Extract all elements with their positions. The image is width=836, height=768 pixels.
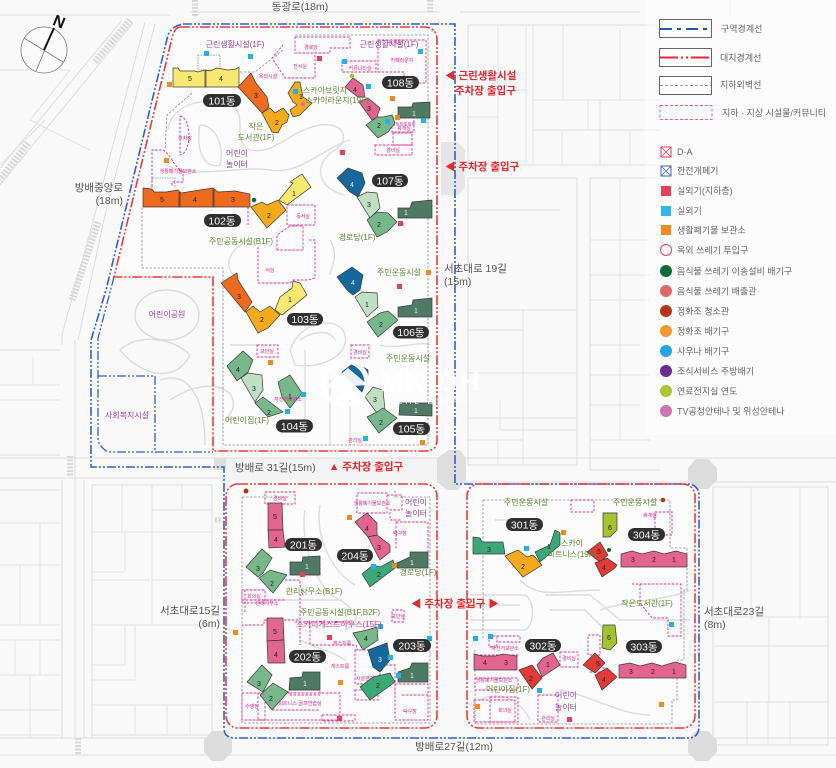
legend: sauna vent: 사우나 배기구: [677, 346, 729, 356]
road: 23gil: 서초대로23길: [704, 605, 764, 618]
facility labels: purple: 어린이공원: [149, 309, 185, 319]
facility labels: purple: 어린이: [226, 148, 248, 158]
legend: underground wall: 지하외벽선: [720, 79, 761, 90]
tiny facility captions: 커뮤니티실: [348, 65, 372, 72]
303 pill: 303동: [630, 642, 658, 654]
203 pill: [393, 639, 431, 652]
zone boundary line: [91, 24, 699, 738]
building 103: 3: [237, 294, 241, 301]
facility labels: green: 주민운동시설: [386, 353, 430, 363]
watermark logo: MK.DH: [380, 366, 480, 397]
building 203: 2: [376, 683, 380, 690]
building 204: 1: [410, 560, 414, 567]
building 302: 2: [529, 676, 533, 683]
facility labels: purple: 근린생활시설(1F): [360, 39, 419, 49]
facility labels: green: 경로당(1F): [400, 567, 437, 577]
building 202: 2: [269, 696, 273, 703]
building 203: 4: [364, 636, 368, 643]
facility labels: green: 경로당(1F): [339, 232, 376, 242]
building 304: 2: [652, 557, 656, 564]
entrance: north-east: 주차장 출입구: [455, 84, 516, 97]
building 101: [173, 67, 312, 133]
building 107: 2: [377, 222, 381, 229]
106 pill: 106동: [397, 327, 425, 339]
building 204: 4: [365, 526, 369, 533]
tiny facility captions: 회의실: [498, 707, 512, 714]
building 201: 1: [305, 564, 309, 571]
building 302: 1: [546, 662, 550, 669]
entrance: north-east: ◀ 근린생활시설: [445, 69, 516, 82]
legend: kitchen vent: 조식서비스 주방배기: [677, 366, 754, 376]
road: west: 방배중앙로: [75, 182, 123, 194]
legend: site boundary: 대지경계선: [720, 52, 761, 63]
road: east: (15m): [444, 276, 471, 288]
tiny facility captions: 휴게실: [643, 512, 657, 519]
road: north: 동광로(18m): [272, 1, 328, 13]
building 104: 4: [236, 367, 240, 374]
101 pill: 101동: [208, 96, 236, 108]
parking entrance labels: [329, 69, 520, 610]
facility labels: green: 스카이브릿지: [303, 85, 347, 95]
tiny facility captions: 독서실: [296, 213, 310, 220]
building 108: 1: [412, 111, 416, 118]
building 104: [227, 351, 302, 417]
compass: [21, 12, 67, 73]
tiny facility captions: 회의실: [247, 593, 261, 600]
watermark logo: [323, 361, 480, 406]
302 pill: [525, 639, 561, 652]
road: 15gil: (6m): [198, 618, 220, 630]
building 202: 4: [274, 652, 278, 659]
building 102: 2: [267, 213, 271, 220]
building 202: 3: [257, 681, 261, 688]
road: 23gil: (8m): [704, 619, 726, 631]
building 302: 3: [504, 660, 508, 667]
tiny facility captions: 자전거보관소: [491, 645, 519, 652]
building 203: [353, 627, 428, 700]
building 303: 1: [672, 669, 676, 676]
legend: sauna vent: [660, 345, 729, 357]
building 105: 1: [414, 408, 418, 415]
building 108: 2: [377, 123, 381, 130]
building 204: [355, 513, 428, 587]
tiny facility captions: 탁구장: [393, 530, 407, 537]
legend: zone boundary: 구역경계선: [721, 23, 762, 34]
tiny facility captions: 생활폐기물보관소: [354, 500, 391, 507]
building 103: 1: [288, 297, 292, 304]
facility labels: purple: [105, 39, 577, 712]
building 202: 5: [273, 629, 277, 636]
tiny facility captions: 피트니스·골프연습실: [278, 700, 322, 707]
building 304: 3: [631, 557, 635, 564]
building 303: 2: [651, 669, 655, 676]
building 102: [143, 174, 311, 228]
building 303: [583, 625, 686, 690]
entrance: north-east: [445, 69, 516, 97]
legend: food waste pipe: [660, 285, 757, 297]
site interiors: [100, 30, 693, 726]
building 105: 3: [373, 397, 377, 404]
facility labels: green: [209, 85, 673, 694]
301 pill: [506, 518, 543, 532]
social welfare and park inner boundary: [98, 277, 213, 452]
facility labels: green: 주민운동시설: [377, 267, 421, 277]
facility labels: green: 주민운동시설: [613, 497, 657, 507]
108 pill: [382, 76, 419, 90]
304 pill: 304동: [633, 530, 660, 542]
302 pill: 302동: [529, 640, 557, 652]
tiny facility captions: 수영장: [245, 703, 259, 710]
building 104: 1: [288, 394, 292, 401]
201 pill: [285, 538, 322, 552]
community facility dashed outlines: north block: [152, 37, 431, 358]
102 pill: 102동: [208, 216, 236, 228]
facility labels: purple: 놀이터: [226, 159, 248, 169]
105 pill: [393, 422, 430, 436]
legend: outdoor unit: [661, 205, 702, 216]
tiny facility captions: 식당: [265, 267, 275, 274]
building number pills: [203, 76, 665, 664]
304 pill: [628, 528, 665, 542]
legend: septic cleanout: 정화조 청소관: [677, 306, 729, 316]
road: west: [75, 182, 123, 207]
facility labels: green: 스카이라운지(19F): [305, 95, 369, 105]
building 104: 3: [252, 386, 256, 393]
tiny facility captions: 경비실: [562, 655, 576, 662]
building 106: 1: [414, 308, 418, 315]
facility labels: purple: 놀이터: [555, 702, 577, 712]
building 204: 2: [377, 572, 381, 579]
building 303: 6: [607, 635, 611, 642]
tiny facility captions: 시설관리: [356, 675, 374, 682]
building 202: [247, 618, 320, 710]
building 303: 3: [629, 669, 633, 676]
legend: food waste pipe: 음식물 쓰레기 배출관: [677, 286, 757, 296]
building 304: 5: [597, 549, 601, 556]
building 101: 5: [188, 76, 192, 83]
landscape paths: [120, 101, 690, 720]
facility labels: green: 피트니스(19F): [548, 549, 597, 559]
legend: antenna: TV공청안테나 및 위성안테나: [677, 406, 785, 416]
building 303: 5: [596, 661, 600, 668]
road: east: 서초대로 19길: [444, 262, 507, 275]
legend panel: [645, 0, 836, 435]
tiny facility captions: 보안실: [260, 348, 274, 355]
building 201: 5: [273, 514, 277, 521]
building 106: 1: [365, 302, 369, 309]
building 107: 4: [350, 182, 354, 189]
road: 31gil: 방배로 31길(15m): [235, 461, 316, 474]
tiny facility captions: 옥외시설: [259, 73, 278, 80]
legend: septic cleanout: [660, 305, 729, 317]
107 pill: [372, 174, 408, 188]
legend: facilities: 지하 · 지상 시설물/커뮤니티: [722, 108, 826, 118]
tiny facility captions: 경비실: [386, 147, 400, 154]
legend: fuel cell flue: 연료전지실 연도: [677, 386, 737, 396]
community facility dashed outlines: southwest block: [242, 492, 428, 721]
building 102: 3: [231, 197, 235, 204]
tiny facility captions: 탁구장: [403, 708, 417, 715]
road: 15gil: 서초대로15길: [160, 604, 220, 617]
107 pill: 107동: [376, 176, 404, 188]
building 304: 4: [602, 565, 606, 572]
entrance: south: ▲ 주차장 출입구: [329, 460, 404, 473]
facility labels: purple: 근린생활시설(1F): [206, 39, 265, 49]
building 203: 1: [410, 673, 414, 680]
108 pill: 108동: [387, 78, 414, 90]
tiny facility captions: 카페라운지: [390, 57, 414, 64]
facility labels: green: 스카이게스트하우스(15F): [296, 619, 382, 629]
building 102: 4: [193, 197, 197, 204]
building 105: [342, 362, 432, 433]
building 106: [337, 267, 432, 337]
tiny facility captions: 게스트룸: [333, 640, 352, 647]
building 105: 2: [379, 420, 383, 427]
facility labels: purple: 놀이터: [405, 508, 427, 518]
legend: underground wall: [660, 76, 761, 94]
building 108: 3: [367, 106, 371, 113]
tiny facility captions: 주차장: [178, 135, 192, 142]
building 201: [246, 503, 320, 593]
303 pill: [626, 640, 662, 654]
legend: kitchen vent: [660, 365, 754, 377]
building 103: [221, 273, 307, 333]
building 104: 2: [267, 410, 271, 417]
facility labels: purple: 어린이: [405, 497, 427, 507]
road: 23gil: [704, 605, 764, 631]
201 pill: 201동: [290, 540, 317, 552]
legend: septic vent: 정화조 배기구: [677, 326, 729, 336]
facility labels: green: 주민운동시설: [504, 497, 548, 507]
204 pill: [337, 549, 373, 562]
facility labels: green: 작은: [249, 121, 263, 131]
legend: fuel cell flue: [660, 385, 737, 397]
building 302: [474, 653, 560, 689]
building 301: 3: [487, 547, 491, 554]
building 107: 1: [404, 210, 408, 217]
tiny facility captions: 생활폐기물보관소: [476, 677, 513, 684]
site boundary lines: [114, 27, 695, 728]
legend: switchgear: [661, 165, 718, 176]
building 303: 4: [602, 677, 606, 684]
105 pill: 105동: [398, 424, 425, 436]
building 201: 4: [274, 537, 278, 544]
legend: food waste vent: 음식물 쓰레기 이송설비 배기구: [677, 266, 792, 276]
facility labels: green: 스카이: [561, 538, 583, 548]
building 108: [345, 78, 430, 138]
building 301: 1: [547, 544, 551, 551]
facility labels: green: 도서관(1F): [238, 132, 275, 142]
legend: site boundary: [660, 48, 761, 66]
104 pill: [276, 420, 313, 433]
building 107: 3: [367, 202, 371, 209]
facility labels: green: 주민공동시설(B1F): [209, 236, 273, 246]
legend: DA: [661, 147, 692, 157]
building 106: 2: [379, 322, 383, 329]
road: 27gil: 방배로27길(12m): [415, 740, 493, 753]
facility labels: green: 주민공동시설(B1F,B2F): [300, 607, 380, 617]
facility labels: green: 관리사무소(B1F): [286, 586, 343, 596]
tiny facility captions: 관리사무소: [255, 600, 279, 607]
entrance: centre: ◀ 주차장 출입구 ▶: [411, 597, 499, 610]
building 106: 4: [351, 280, 355, 287]
legend: facilities: [660, 106, 826, 120]
tiny facility captions: 휴게실: [388, 39, 402, 46]
facility labels: purple: 사회복지시설: [105, 410, 149, 420]
legend: DA: D·A: [677, 147, 692, 157]
facility labels: green: 어린이집(1F): [486, 684, 530, 694]
building 301: 2: [521, 564, 525, 571]
202 pill: 202동: [294, 652, 321, 664]
tiny facility captions: 게스트룸: [331, 663, 350, 670]
tiny facility captions: 휴게실: [397, 125, 411, 132]
103 pill: 103동: [291, 314, 319, 326]
facility labels: green: 어린이집(1F): [225, 415, 269, 425]
road: 15gil: [160, 604, 220, 630]
building 201: 2: [270, 581, 274, 588]
legend: trash inlet: 옥외 쓰레기 투입구: [677, 244, 748, 256]
204 pill: 204동: [341, 550, 369, 562]
106 pill: [393, 326, 429, 339]
road: east: [444, 262, 507, 288]
building 101: 2: [275, 120, 279, 127]
entrance: east: ◀ 주차장 출입구: [445, 160, 520, 173]
building 304: 6: [608, 525, 612, 532]
legend: waste storage: 생활폐기물 보관소: [677, 224, 746, 236]
tiny facility captions: 경비실: [353, 349, 367, 356]
102 pill: [204, 214, 241, 228]
building 202: 1: [303, 681, 307, 688]
103 pill: [287, 313, 323, 326]
building 107: [337, 168, 432, 237]
compass: N: [50, 12, 67, 33]
tiny facility captions: 전시실: [293, 63, 307, 70]
tiny facility captions: 보안실: [391, 613, 405, 620]
legend: zone boundary: [660, 20, 762, 38]
104 pill: 104동: [281, 421, 308, 433]
building 101: 1: [299, 94, 303, 101]
301 pill: 301동: [511, 520, 538, 532]
building 301: [473, 530, 560, 577]
legend: basement outdoor unit: 실외기(지하층): [677, 185, 733, 196]
building 204: 3: [377, 545, 381, 552]
legend: switchgear: 한전개폐기: [677, 165, 718, 176]
building 101: 4: [219, 76, 223, 83]
tiny facility captions: 관리실: [348, 437, 362, 444]
building 302: 4: [483, 660, 487, 667]
tiny facility captions: 경비실: [273, 495, 287, 502]
building 102: 1: [292, 191, 296, 198]
legend: outdoor unit: 실외기: [677, 205, 702, 216]
tiny facility captions: 자전거보관소: [274, 396, 302, 403]
building 103: 2: [260, 317, 264, 324]
facility labels: green: 작은도서관(1F): [621, 598, 673, 608]
building 304: [587, 513, 687, 577]
building 102: 5: [160, 197, 164, 204]
tiny facility captions: 관리실: [541, 715, 555, 722]
building 108: 4: [353, 87, 357, 94]
facility labels: purple: 어린이: [555, 690, 577, 700]
underground wall lines: [142, 35, 687, 724]
building 304: 1: [672, 557, 676, 564]
legend: septic vent: [660, 325, 729, 337]
203 pill: 203동: [398, 640, 426, 652]
watermark logo: REAL ESTATE: [388, 397, 474, 406]
202 pill: [289, 650, 326, 664]
road: west: (18m): [96, 195, 123, 207]
building 101: 3: [254, 93, 258, 100]
tiny facility captions: 생활폐기물보관소: [160, 168, 197, 175]
small equipment markers: [164, 49, 674, 722]
tiny facility captions: [160, 39, 657, 722]
101 pill: [203, 94, 241, 108]
building 201: 3: [256, 566, 260, 573]
community facility dashed outlines: southeast block: [474, 500, 681, 722]
building 203: 3: [378, 657, 382, 664]
tiny facility captions: 경로당: [304, 44, 318, 51]
